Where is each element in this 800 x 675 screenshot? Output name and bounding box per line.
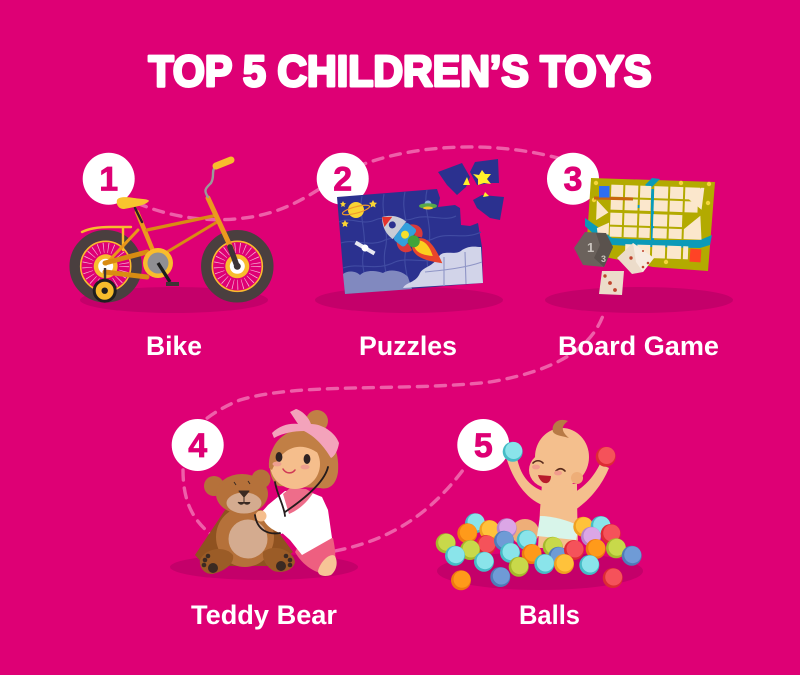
teddy right leg: [263, 548, 295, 572]
saddle: [117, 197, 149, 209]
ball in baby's left hand: [503, 442, 523, 462]
girl head: [270, 439, 320, 489]
diaper: [537, 516, 579, 540]
grey die: [574, 232, 613, 267]
puzzle board: [337, 189, 483, 294]
girl arm: [262, 507, 292, 534]
teddy ears: [204, 476, 224, 496]
brown path: [594, 198, 633, 199]
teddy back shade: [195, 510, 293, 566]
training wheel: [94, 268, 115, 301]
ball pit: [436, 513, 642, 590]
icon: puzzle: [337, 159, 504, 294]
girl leg: [295, 538, 335, 575]
ufo: [419, 200, 437, 210]
icon: bike: [75, 160, 268, 301]
grey die: 1: [587, 240, 594, 255]
number badge 2: 2: [333, 160, 352, 198]
dim clouds: [343, 270, 412, 294]
board: [586, 178, 715, 271]
number badge 4: 4: [188, 427, 207, 465]
baby left arm: [507, 458, 546, 506]
teddy bear: [195, 470, 295, 574]
icon: baby with balls: [436, 420, 642, 590]
handle grip: [216, 160, 231, 166]
pink bow: [272, 409, 339, 458]
shadow: board game: [545, 287, 733, 313]
crowns: [592, 181, 711, 264]
rear wheel: [75, 235, 137, 297]
shadow: bike: [80, 287, 268, 313]
teddy belly: [228, 520, 268, 558]
rear rack: [82, 227, 131, 250]
puzzle piece seams: [339, 190, 481, 292]
dashed connector path: [137, 147, 607, 551]
shadow: puzzles: [315, 287, 503, 313]
teddy right paw: [276, 554, 292, 571]
girl collar trim: [283, 488, 313, 514]
title: TOP 5 CHILDREN’S TOYS: [148, 47, 652, 96]
icon: board game: [574, 178, 715, 295]
blue start square: [599, 186, 610, 198]
girl coat: [262, 490, 332, 555]
number badge 3: 3: [564, 160, 582, 198]
girl hair bun: [306, 410, 328, 432]
label: board game: Board Game: [558, 331, 719, 361]
teddy muzzle: [226, 492, 262, 514]
stars: [340, 200, 377, 227]
grey die: 3: [601, 254, 606, 264]
satellite: [354, 239, 376, 257]
number badge 3: [547, 153, 599, 205]
label: bike: Bike: [146, 331, 202, 361]
bright cloud seams: [425, 252, 482, 286]
label: balls: Balls: [519, 600, 580, 630]
number badge 1: [83, 153, 135, 205]
girl foot: [318, 555, 337, 576]
label: teddy bear: Teddy Bear: [191, 600, 337, 630]
chainring and pedal: [143, 248, 179, 286]
lower die: [599, 271, 624, 295]
red finish square: [690, 249, 701, 262]
number badge 4: [172, 419, 224, 471]
loose puzzle piece: [470, 159, 499, 185]
number badge 1: 1: [99, 160, 118, 198]
icon: girl with teddy bear: [195, 409, 339, 576]
girl hair back: [270, 428, 338, 488]
teddy left leg: [200, 549, 233, 574]
number badge 2: [317, 153, 369, 205]
white die: [617, 243, 654, 274]
baby body: [538, 484, 578, 548]
teddy head: [216, 474, 268, 514]
front wheel: [206, 235, 268, 297]
baby hair curl: [553, 420, 569, 438]
face: [272, 452, 310, 473]
label: puzzles: Puzzles: [359, 331, 457, 361]
baby cheeks: [529, 452, 569, 488]
planet: [342, 202, 370, 218]
cells: [595, 184, 704, 260]
teddy nose and eyes: [234, 481, 250, 504]
baby ear: [571, 472, 583, 484]
teddy body: [216, 507, 274, 567]
baby thigh: [511, 519, 539, 545]
teal river: [585, 178, 712, 248]
loose puzzle piece: [473, 195, 504, 220]
rocket: [373, 205, 451, 275]
teddy left paw: [202, 554, 218, 573]
stethoscope: [255, 467, 328, 533]
number badge 5: [457, 419, 509, 471]
number badge 5: 5: [474, 427, 493, 465]
frame: [105, 167, 237, 277]
baby head: [535, 428, 589, 486]
shadow: teddy bear: [170, 554, 358, 580]
bright clouds: [403, 247, 483, 288]
shadow: balls: [437, 552, 643, 590]
girl hand: [256, 510, 266, 522]
baby face: [532, 461, 565, 483]
loose puzzle piece: [438, 163, 470, 195]
yellow stars: [463, 170, 491, 197]
girl fringe: [269, 432, 324, 470]
ball in baby's right hand: [596, 447, 616, 467]
baby right arm: [572, 464, 609, 510]
